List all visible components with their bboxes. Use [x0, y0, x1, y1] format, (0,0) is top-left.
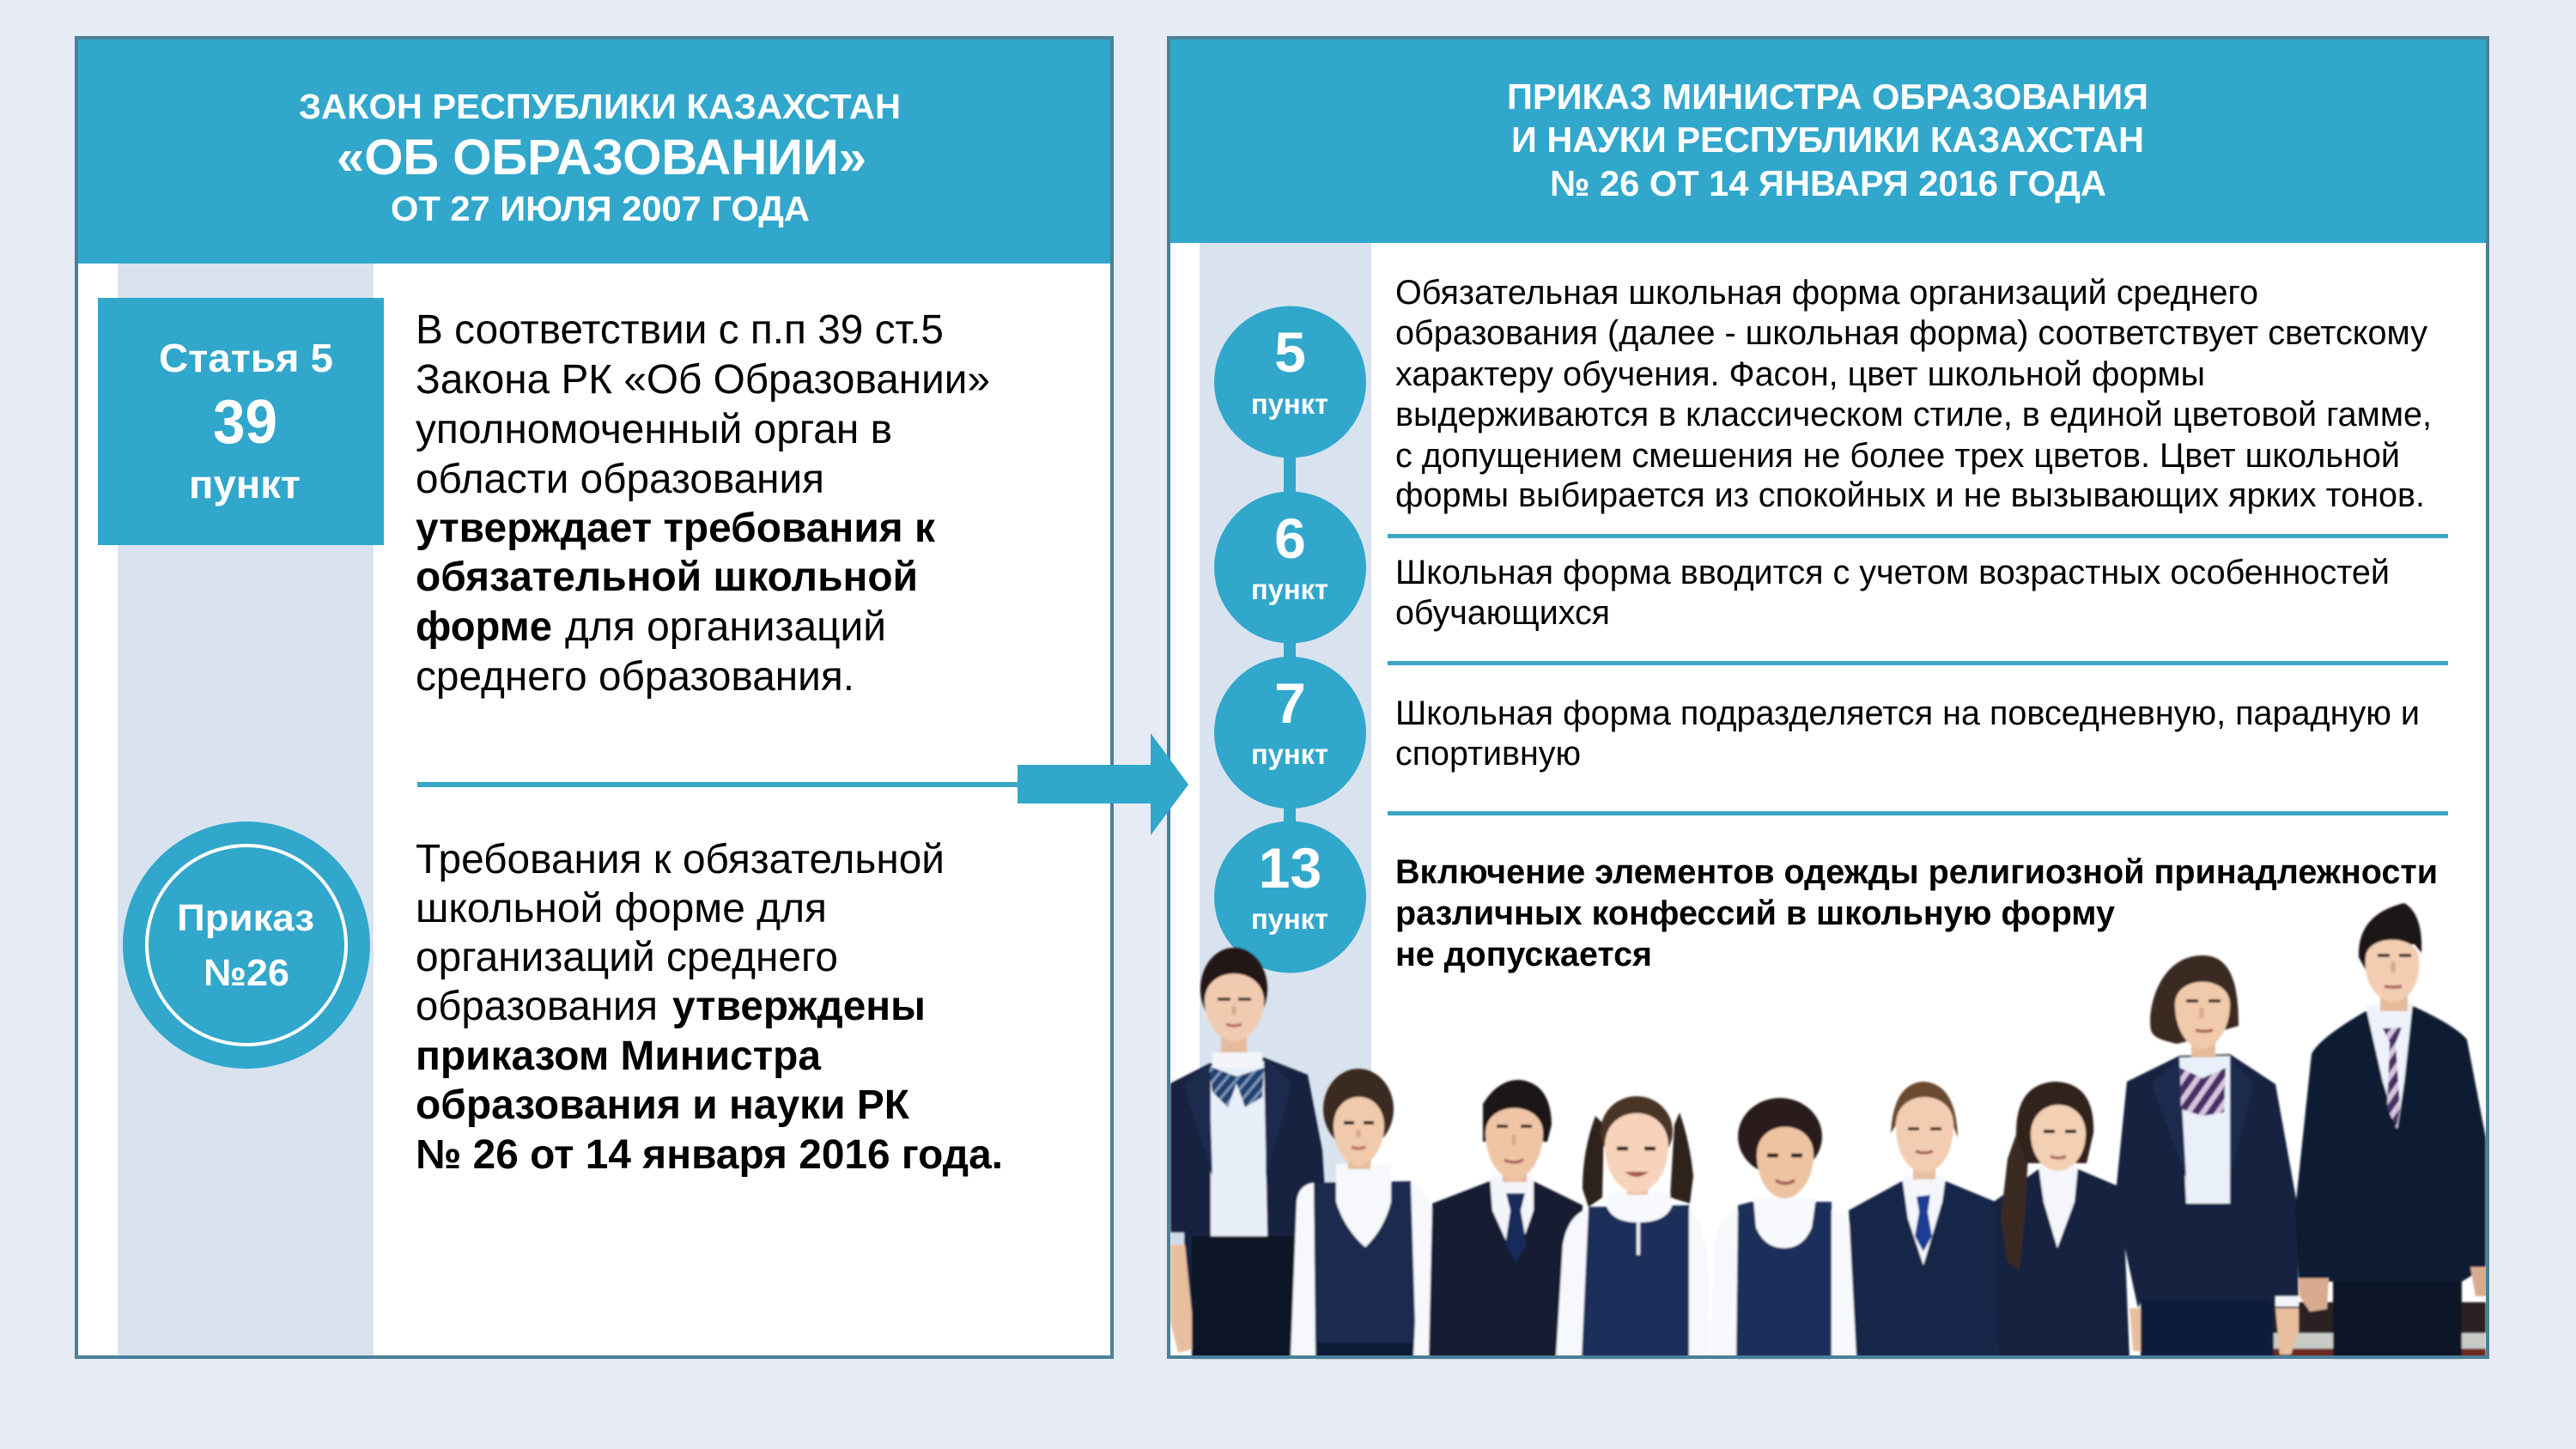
- panel: law on education: [76, 38, 1112, 1358]
- heading: order title: ПРИКАЗ МИНИСТРА ОБРАЗОВАНИЯ: [1507, 76, 2148, 117]
- student 7: girl with braid: [1994, 1082, 2129, 1358]
- text block: point 5: с допущением смешения не более трех цветов. Цвет школьной: [1395, 437, 2400, 475]
- heading: law title: ОТ 27 ИЮЛЯ 2007 ГОДА: [391, 189, 810, 228]
- student 8: tall girl with purple bow: [2115, 955, 2299, 1358]
- student 9: tall boy with striped tie: [2295, 903, 2487, 1358]
- point 13: [1214, 821, 1366, 973]
- text block: point 5: выдерживаются в классическом стиле, в единой цветовой гамме,: [1395, 396, 2432, 433]
- point 6: пункт: [1251, 573, 1328, 605]
- badge: article 5 point 39: пункт: [189, 462, 301, 506]
- text block: article statement: форме: [416, 604, 552, 650]
- point 7: 7: [1274, 671, 1306, 735]
- panel: minister order: [1169, 38, 2488, 1358]
- heading: law title: ЗАКОН РЕСПУБЛИКИ КАЗАХСТАН: [299, 87, 901, 126]
- text block: article statement: для организаций: [565, 604, 886, 650]
- arrow from law panel to order panel: [1018, 733, 1188, 835]
- text block: point 13: не допускается: [1395, 936, 1652, 973]
- student 2: girl in vest: [1291, 1069, 1432, 1358]
- text block: point 13: Включение элементов одежды религиозной принадлежности: [1395, 853, 2438, 891]
- photo: group of students in uniform: [1170, 903, 2487, 1358]
- text block: order statement: приказом Министра: [416, 1034, 821, 1079]
- text block: article statement: среднего образования.: [416, 654, 854, 700]
- text block: point 5: формы выбирается из спокойных и не вызывающих ярких тонов.: [1395, 476, 2425, 514]
- text block: order statement: образования и науки РК: [416, 1082, 910, 1128]
- point 13: 13: [1259, 836, 1321, 900]
- point 5: [1214, 306, 1366, 458]
- heading: order title: № 26 ОТ 14 ЯНВАРЯ 2016 ГОДА: [1550, 163, 2106, 203]
- student 5: girl with short hair: [1710, 1098, 1863, 1358]
- text block: article statement: обязательной школьной: [416, 555, 918, 600]
- point 6: [1214, 491, 1366, 644]
- heading: law title: [299, 87, 901, 228]
- student 4: girl with pigtails: [1556, 1096, 1709, 1358]
- point 5: 5: [1274, 320, 1306, 384]
- text block: point 6: обучающихся: [1395, 594, 1610, 632]
- text block: order statement: школьной форме для: [416, 886, 827, 931]
- text block: order statement: № 26 от 14 января 2016 года.: [416, 1132, 1003, 1178]
- text block: point 7: спортивную: [1395, 735, 1581, 773]
- text block: point 13: различных конфессий в школьную форму: [1395, 894, 2116, 932]
- text block: point 13: [1395, 853, 2438, 973]
- badge: order no. 26: №26: [204, 952, 289, 994]
- text block: article statement: области образования: [416, 457, 824, 502]
- badge: order no. 26: Приказ: [177, 897, 314, 939]
- badge: article 5 point 39: 39: [213, 388, 277, 457]
- heading: order title: [1507, 76, 2148, 203]
- text block: point 6: Школьная форма вводится с учетом возрастных особенностей: [1395, 554, 2390, 591]
- point 6: 6: [1274, 506, 1306, 570]
- right panel header: [1169, 38, 2488, 243]
- heading: law title: «ОБ ОБРАЗОВАНИИ»: [337, 130, 866, 185]
- text block: point 5: образования (далее - школьная форма) соответствует светскому: [1395, 314, 2427, 352]
- text block: point 7: Школьная форма подразделяется на повседневную, парадную и: [1395, 694, 2420, 732]
- timeline of points: [1214, 306, 1366, 973]
- point 5: пункт: [1251, 388, 1328, 420]
- text block: order statement: утверждены: [672, 984, 926, 1029]
- left panel header: [76, 38, 1112, 264]
- text block: article statement: уполномоченный орган в: [416, 407, 892, 452]
- text block: article statement: Закона РК «Об Образовании»: [416, 357, 990, 403]
- text block: article statement: В соответствии с п.п 39 ст.5: [416, 307, 944, 353]
- badge: article 5 point 39: [98, 298, 384, 545]
- right side column: [1200, 242, 1371, 1358]
- student 6: boy with blue tie: [1849, 1082, 2006, 1358]
- text block: point 7: [1395, 694, 2420, 773]
- text block: order statement: Требования к обязательной: [416, 837, 945, 882]
- text block: point 5: характеру обучения. Фасон, цвет школьной формы: [1395, 355, 2205, 393]
- text block: order statement: [416, 837, 1003, 1178]
- text block: point 6: [1395, 554, 2390, 632]
- point 13: пункт: [1251, 903, 1328, 935]
- badge: order no. 26: [123, 822, 370, 1069]
- badge: article 5 point 39: Статья 5: [159, 336, 333, 380]
- left side column: [118, 263, 374, 1358]
- point 7: [1214, 657, 1366, 809]
- student 1: tall girl: [1170, 948, 1329, 1358]
- floor strip behind the older students: [2267, 1302, 2486, 1357]
- text block: point 5: Обязательная школьная форма организаций среднего: [1395, 274, 2258, 312]
- text block: article statement: утверждает требования к: [416, 506, 936, 551]
- point 7: пункт: [1251, 738, 1328, 770]
- student 3: boy in blazer: [1429, 1080, 1585, 1358]
- text block: order statement: образования: [416, 984, 658, 1029]
- text block: point 5: [1395, 274, 2432, 514]
- heading: order title: И НАУКИ РЕСПУБЛИКИ КАЗАХСТАН: [1511, 119, 2144, 160]
- text block: article statement: [416, 307, 990, 700]
- text block: order statement: организаций среднего: [416, 935, 838, 980]
